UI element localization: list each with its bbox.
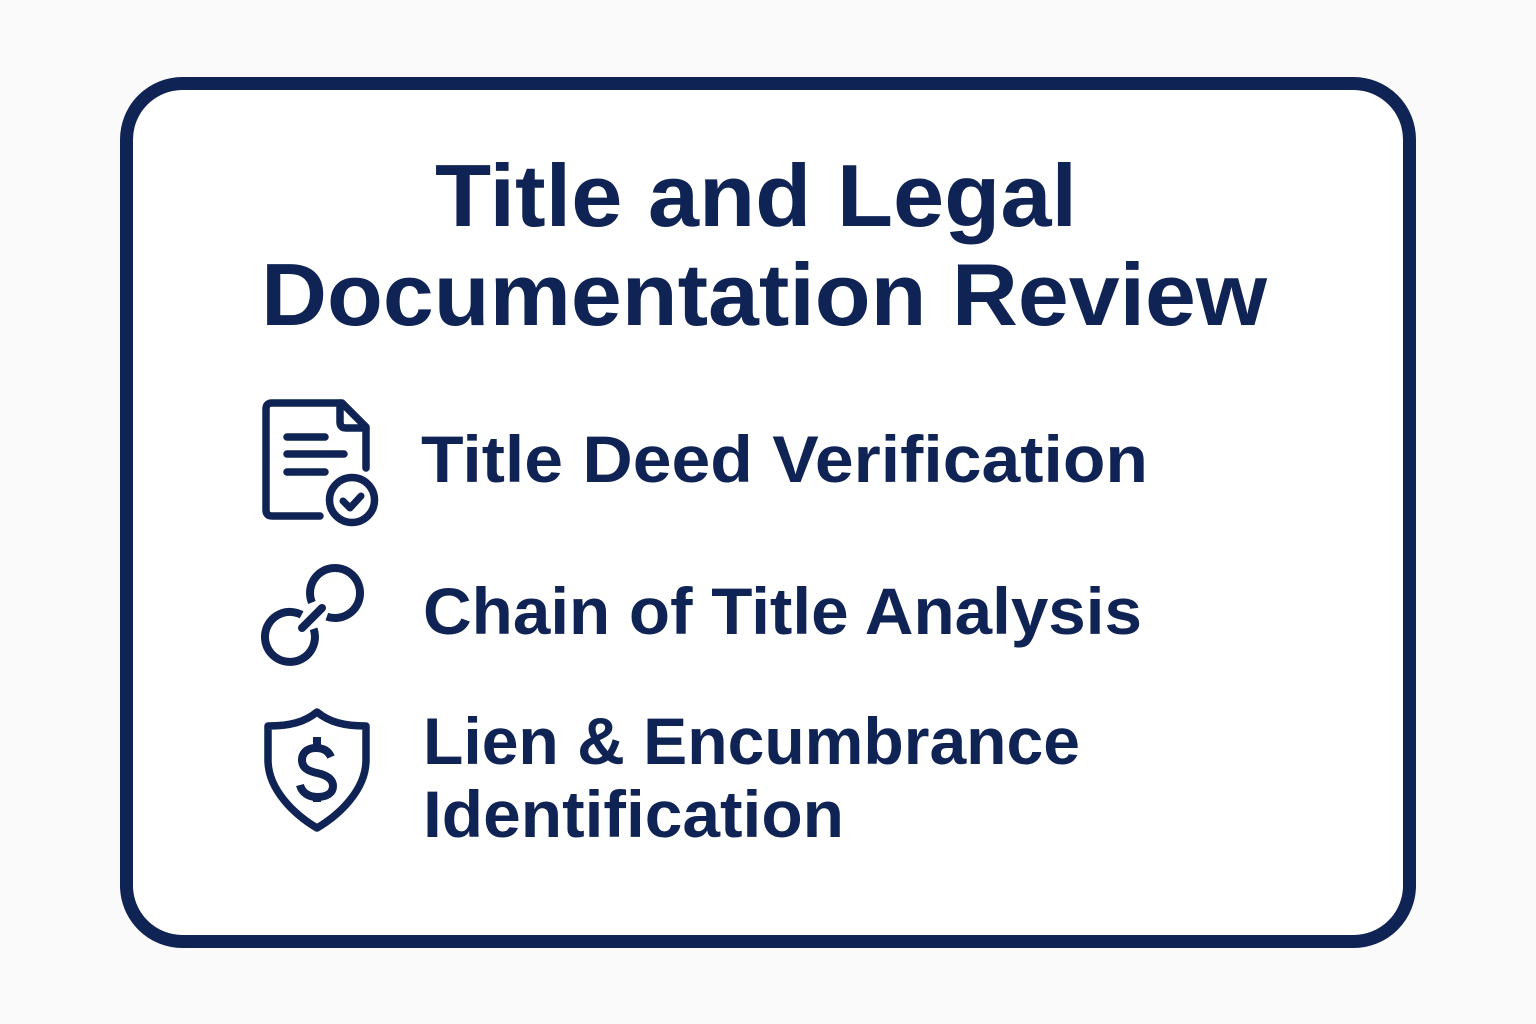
icon: shield with dollar sign xyxy=(268,712,366,828)
title: Documentation Review xyxy=(261,245,1268,344)
label: Lien & Encumbrance Identification: Identification xyxy=(423,777,844,851)
label: Title Deed Verification: Title Deed Verification xyxy=(421,422,1148,496)
label: Lien & Encumbrance Identification xyxy=(423,704,1080,851)
icon: chain link xyxy=(265,568,360,662)
panel: rounded card xyxy=(126,84,1410,942)
label: Chain of Title Analysis: Chain of Title Analysis xyxy=(423,574,1142,648)
label: Lien & Encumbrance Identification: Lien & Encumbrance xyxy=(423,704,1080,778)
icon: document with check mark xyxy=(266,403,374,522)
title: Title and Legal xyxy=(435,146,1077,245)
title xyxy=(261,146,1268,344)
